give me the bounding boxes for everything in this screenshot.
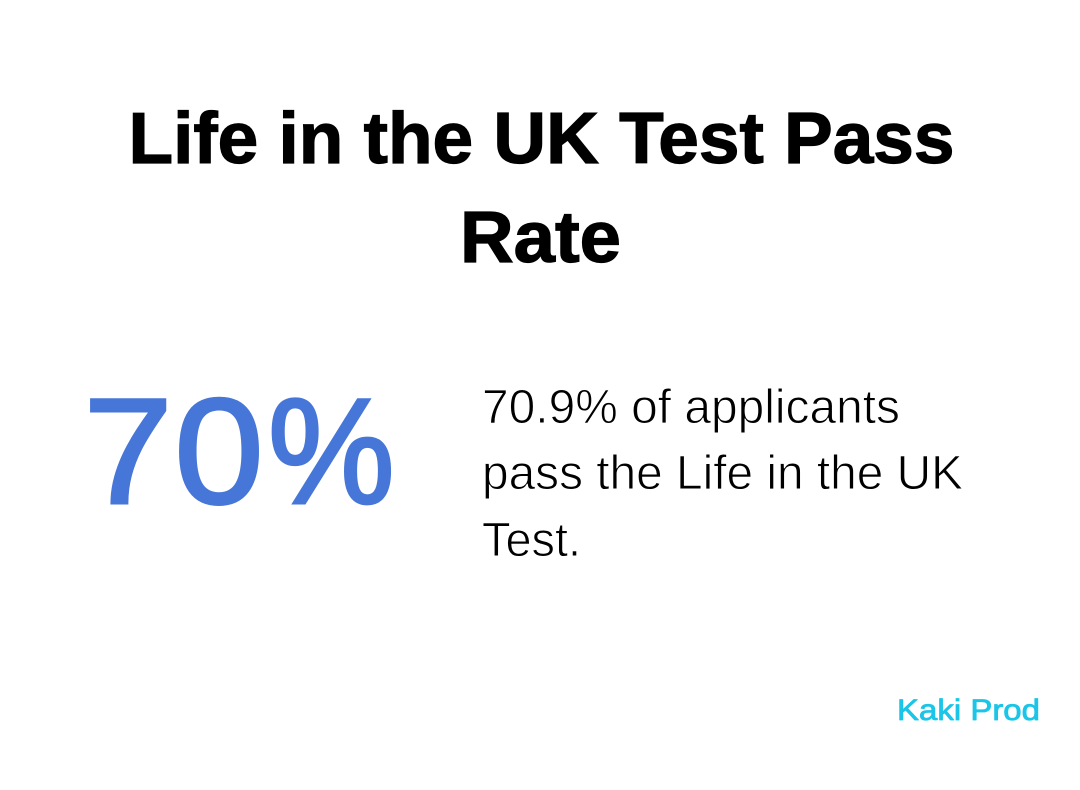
title: Life in the UK Test Pass [128, 99, 954, 179]
big stat: 70% [83, 367, 395, 536]
big stat: 70%: 70 [83, 367, 264, 535]
description text: 70.9% of applicants [482, 381, 900, 434]
description text: Test. [482, 514, 581, 567]
big stat: 70%: % [268, 369, 395, 536]
description text: pass the Life in the UK [482, 447, 963, 500]
title: Rate [460, 198, 621, 278]
title [128, 99, 954, 278]
description text [482, 381, 963, 567]
logo: Kaki Prod: Kaki Prod [897, 694, 1040, 727]
